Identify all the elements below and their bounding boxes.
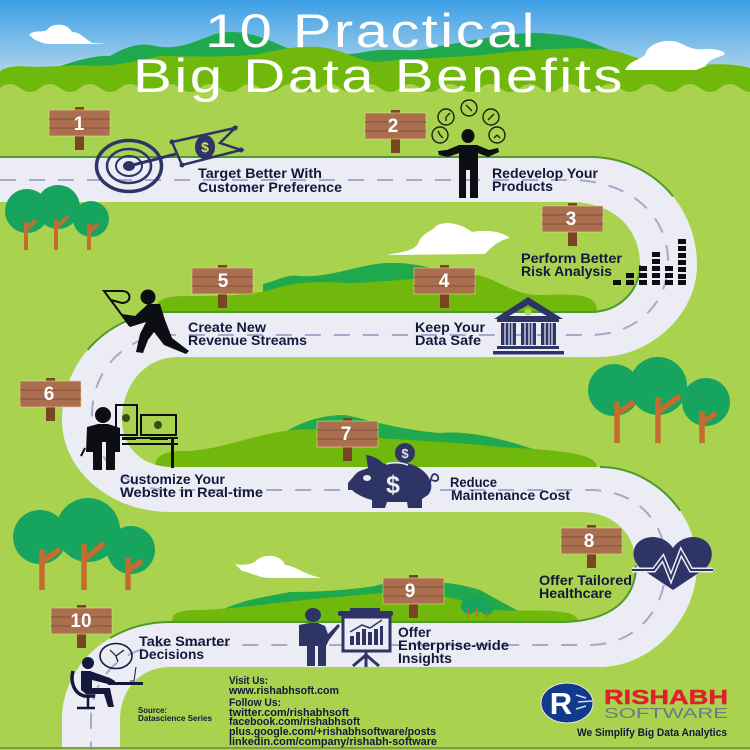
label 3: Perform Better — [521, 250, 623, 266]
sky — [0, 0, 750, 95]
label 5 — [188, 319, 307, 348]
sign 4 — [414, 265, 475, 308]
label 1: Customer Preference — [198, 179, 342, 195]
sign 3: 3 — [566, 209, 576, 230]
label 1: Target Better With — [198, 165, 322, 181]
sign 7: 7 — [341, 424, 351, 445]
cloud: lower — [235, 556, 322, 578]
icon: man with net — [104, 290, 189, 354]
title: 10 Practical — [205, 4, 537, 57]
contact links: Visit Us: — [229, 675, 268, 687]
title: Big Data Benefits — [133, 49, 625, 102]
label 7: Reduce — [450, 474, 497, 490]
sign 5: 5 — [218, 271, 229, 292]
logo: R — [550, 686, 572, 721]
icon: piggy bank: $ — [386, 471, 400, 499]
hill behind road 2 — [155, 263, 597, 312]
label 5: Revenue Streams — [188, 332, 307, 348]
sign 3 — [542, 203, 603, 246]
icon: target and money — [96, 126, 244, 192]
sign 2 — [365, 110, 426, 153]
icon: target and money: $ — [201, 139, 209, 155]
contact links — [228, 675, 437, 748]
label 4: Keep Your — [415, 319, 486, 335]
source: Source: — [138, 706, 167, 715]
logo: RISHABH — [604, 687, 728, 709]
label 2: Products — [492, 178, 553, 194]
label 1 — [198, 165, 342, 195]
label 8 — [539, 572, 632, 601]
contact links: linkedin.com/company/rishabh-software — [229, 736, 437, 748]
label 7: Maintenance Cost — [451, 487, 570, 503]
contact links: Follow Us: — [229, 697, 281, 709]
icon: presenter with chart — [299, 608, 393, 667]
trees: top left — [5, 185, 109, 250]
contact links: www.rishabhsoft.com — [228, 685, 339, 697]
sign 8: 8 — [584, 531, 594, 552]
label 3: Risk Analysis — [521, 263, 612, 279]
logo — [541, 683, 728, 739]
label 9: Offer — [398, 624, 432, 640]
label 3 — [521, 250, 623, 279]
logo: SOFTWARE — [604, 705, 728, 722]
label 4 — [415, 319, 486, 348]
bottom edge line — [0, 747, 750, 749]
sign 10: 10 — [70, 611, 92, 632]
icon: man at computers — [81, 405, 178, 470]
label 9 — [398, 624, 509, 666]
hill behind road 3 — [155, 415, 597, 467]
hill behind road 4 — [172, 581, 578, 622]
icon: clock and man at laptop — [72, 644, 143, 708]
label 6: Website in Real-time — [120, 484, 263, 500]
sign 10 — [51, 605, 112, 648]
label 5: Create New — [188, 319, 266, 335]
trees: small — [461, 596, 493, 618]
label 4: Data Safe — [415, 332, 481, 348]
icon: bar chart — [613, 239, 686, 285]
label 6 — [120, 471, 263, 500]
cloud: top left — [29, 25, 108, 44]
label 7 — [450, 474, 570, 503]
sign 4: 4 — [439, 271, 450, 292]
label 9: Enterprise-wide — [398, 637, 509, 653]
trees: right — [588, 357, 730, 443]
source — [138, 706, 213, 723]
label 8: Healthcare — [539, 585, 612, 601]
cloud: middle — [387, 223, 510, 255]
sign 7 — [317, 418, 378, 461]
label 10: Decisions — [139, 646, 204, 662]
sign 1 — [49, 107, 110, 150]
label 6: Customize Your — [120, 471, 226, 487]
label 10: Take Smarter — [139, 633, 231, 649]
sign 5 — [192, 265, 253, 308]
icon: piggy bank: $ — [401, 446, 409, 461]
sign 9: 9 — [405, 581, 415, 602]
sign 2: 2 — [388, 116, 398, 137]
trees: lower left — [13, 498, 155, 590]
sign 6: 6 — [44, 384, 54, 405]
label 2 — [492, 165, 599, 194]
sign 8 — [561, 525, 622, 568]
contact links: facebook.com/rishabhsoft — [229, 716, 360, 728]
cloud: top right — [625, 41, 725, 70]
icon: heart pulse — [632, 537, 713, 590]
background hills — [0, 32, 750, 92]
contact links: plus.google.com/+rishabhsoftware/posts — [229, 726, 436, 738]
label 10 — [139, 633, 231, 662]
label 8: Offer Tailored — [539, 572, 632, 588]
icon: man juggling clocks — [432, 100, 505, 198]
sign 9 — [383, 575, 444, 618]
sign 1: 1 — [74, 114, 85, 135]
source: Datascience Series — [138, 714, 213, 723]
icon: piggy bank — [348, 443, 438, 508]
logo: We Simplify Big Data Analytics — [577, 727, 727, 739]
label 2: Redevelop Your — [492, 165, 599, 181]
contact links: twitter.com/rishabhsoft — [229, 707, 349, 719]
road — [0, 157, 697, 750]
sign 6 — [20, 378, 81, 421]
icon: bank — [493, 297, 564, 354]
title — [133, 4, 625, 102]
label 9: Insights — [398, 650, 452, 666]
